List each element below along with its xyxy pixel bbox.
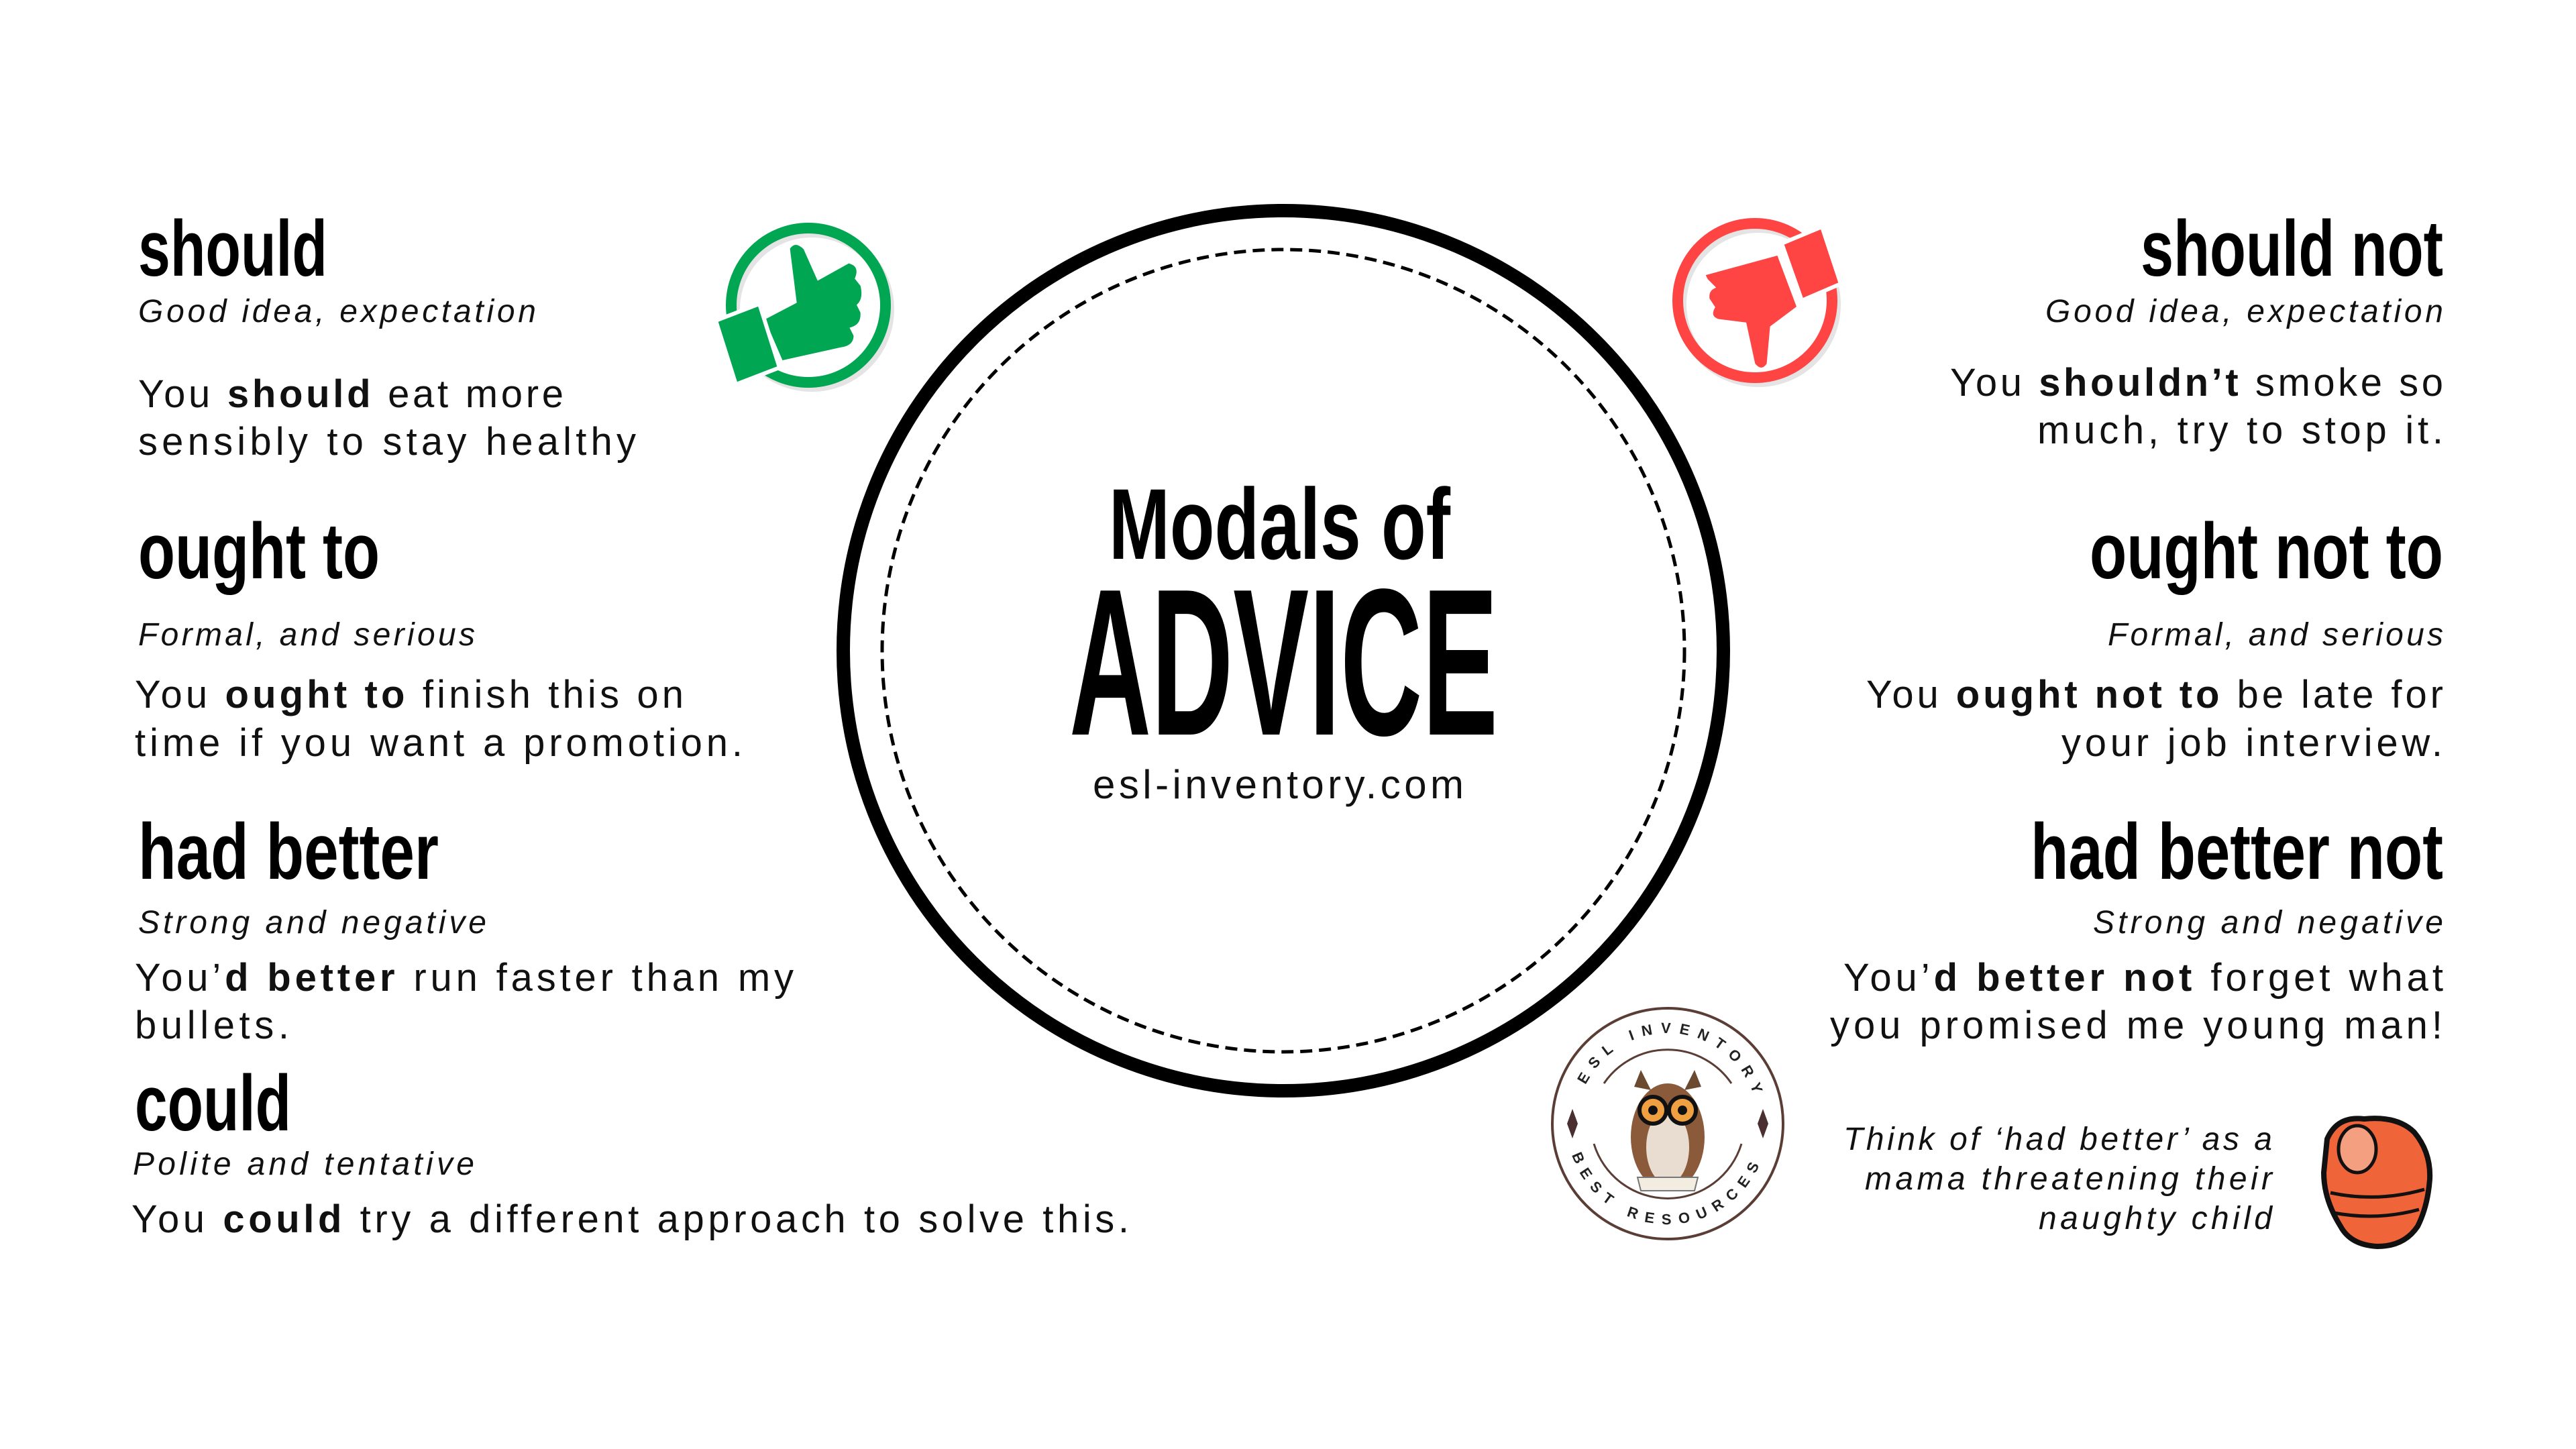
callout: had better note: mama threatening their xyxy=(1865,1161,2273,1197)
panel: could: could xyxy=(135,1059,291,1148)
panel: should not: Good idea, expectation xyxy=(2045,294,2443,329)
callout: had better note xyxy=(1843,1122,2273,1236)
icon: pointing fist xyxy=(2324,1118,2430,1246)
panel: should not: You shouldn’t smoke so xyxy=(1950,361,2443,405)
panel: should: You should eat more xyxy=(138,372,564,416)
panel: had better not: had better not xyxy=(2031,808,2443,896)
panel: could xyxy=(131,1059,1129,1241)
callout: had better note: Think of ‘had better’ as a xyxy=(1843,1122,2272,1157)
panel: ought not to: Formal, and serious xyxy=(2108,617,2443,653)
panel: ought not to: You ought not to be late for xyxy=(1866,673,2443,716)
panel: had better not: you promised me young man! xyxy=(1830,1004,2443,1047)
title: ADVICE xyxy=(1069,546,1498,780)
icon: thumbs down xyxy=(1678,223,1841,382)
panel: had better: You’d better run faster than my xyxy=(135,956,794,1000)
panel: should xyxy=(138,205,636,464)
panel: could: Polite and tentative xyxy=(133,1146,474,1182)
panel: had better not xyxy=(1830,808,2443,1047)
title xyxy=(1069,468,1498,807)
panel: ought to: ought to xyxy=(138,507,380,596)
icon: thumbs up xyxy=(716,228,889,386)
panel: had better xyxy=(135,808,794,1047)
panel: should not: should not xyxy=(2141,205,2443,293)
panel: had better: had better xyxy=(138,808,439,896)
center circle xyxy=(843,211,1723,1091)
panel: ought to xyxy=(135,507,743,765)
panel: could: You could try a different approach to solve this. xyxy=(131,1197,1129,1241)
panel: ought not to: ought not to xyxy=(2090,507,2443,596)
panel: ought not to xyxy=(1866,507,2443,765)
panel: ought to: Formal, and serious xyxy=(138,617,475,653)
callout: had better note: naughty child xyxy=(2039,1201,2273,1236)
icon: owl badge xyxy=(1551,1007,1784,1240)
panel: ought to: time if you want a promotion. xyxy=(135,721,743,765)
panel: ought not to: your job interview. xyxy=(2061,721,2443,765)
panel: had better not: Strong and negative xyxy=(2093,905,2443,941)
icon: owl badge: BEST RESOURCES xyxy=(1572,1152,1758,1225)
panel: should not xyxy=(1950,205,2443,452)
panel: had better not: You’d better not forget what xyxy=(1843,956,2443,1000)
panel: should: sensibly to stay healthy xyxy=(138,420,636,464)
panel: should: should xyxy=(138,205,327,293)
panel: should not: much, try to stop it. xyxy=(2037,409,2443,452)
panel: should: Good idea, expectation xyxy=(138,294,536,329)
icon: owl badge: ESL INVENTORY xyxy=(1577,1022,1763,1091)
panel: ought to: You ought to finish this on xyxy=(135,673,684,716)
title: Modals of xyxy=(1109,468,1451,580)
panel: had better: bullets. xyxy=(135,1004,289,1047)
panel: had better: Strong and negative xyxy=(138,905,486,941)
title: esl-inventory.com xyxy=(1093,762,1464,807)
